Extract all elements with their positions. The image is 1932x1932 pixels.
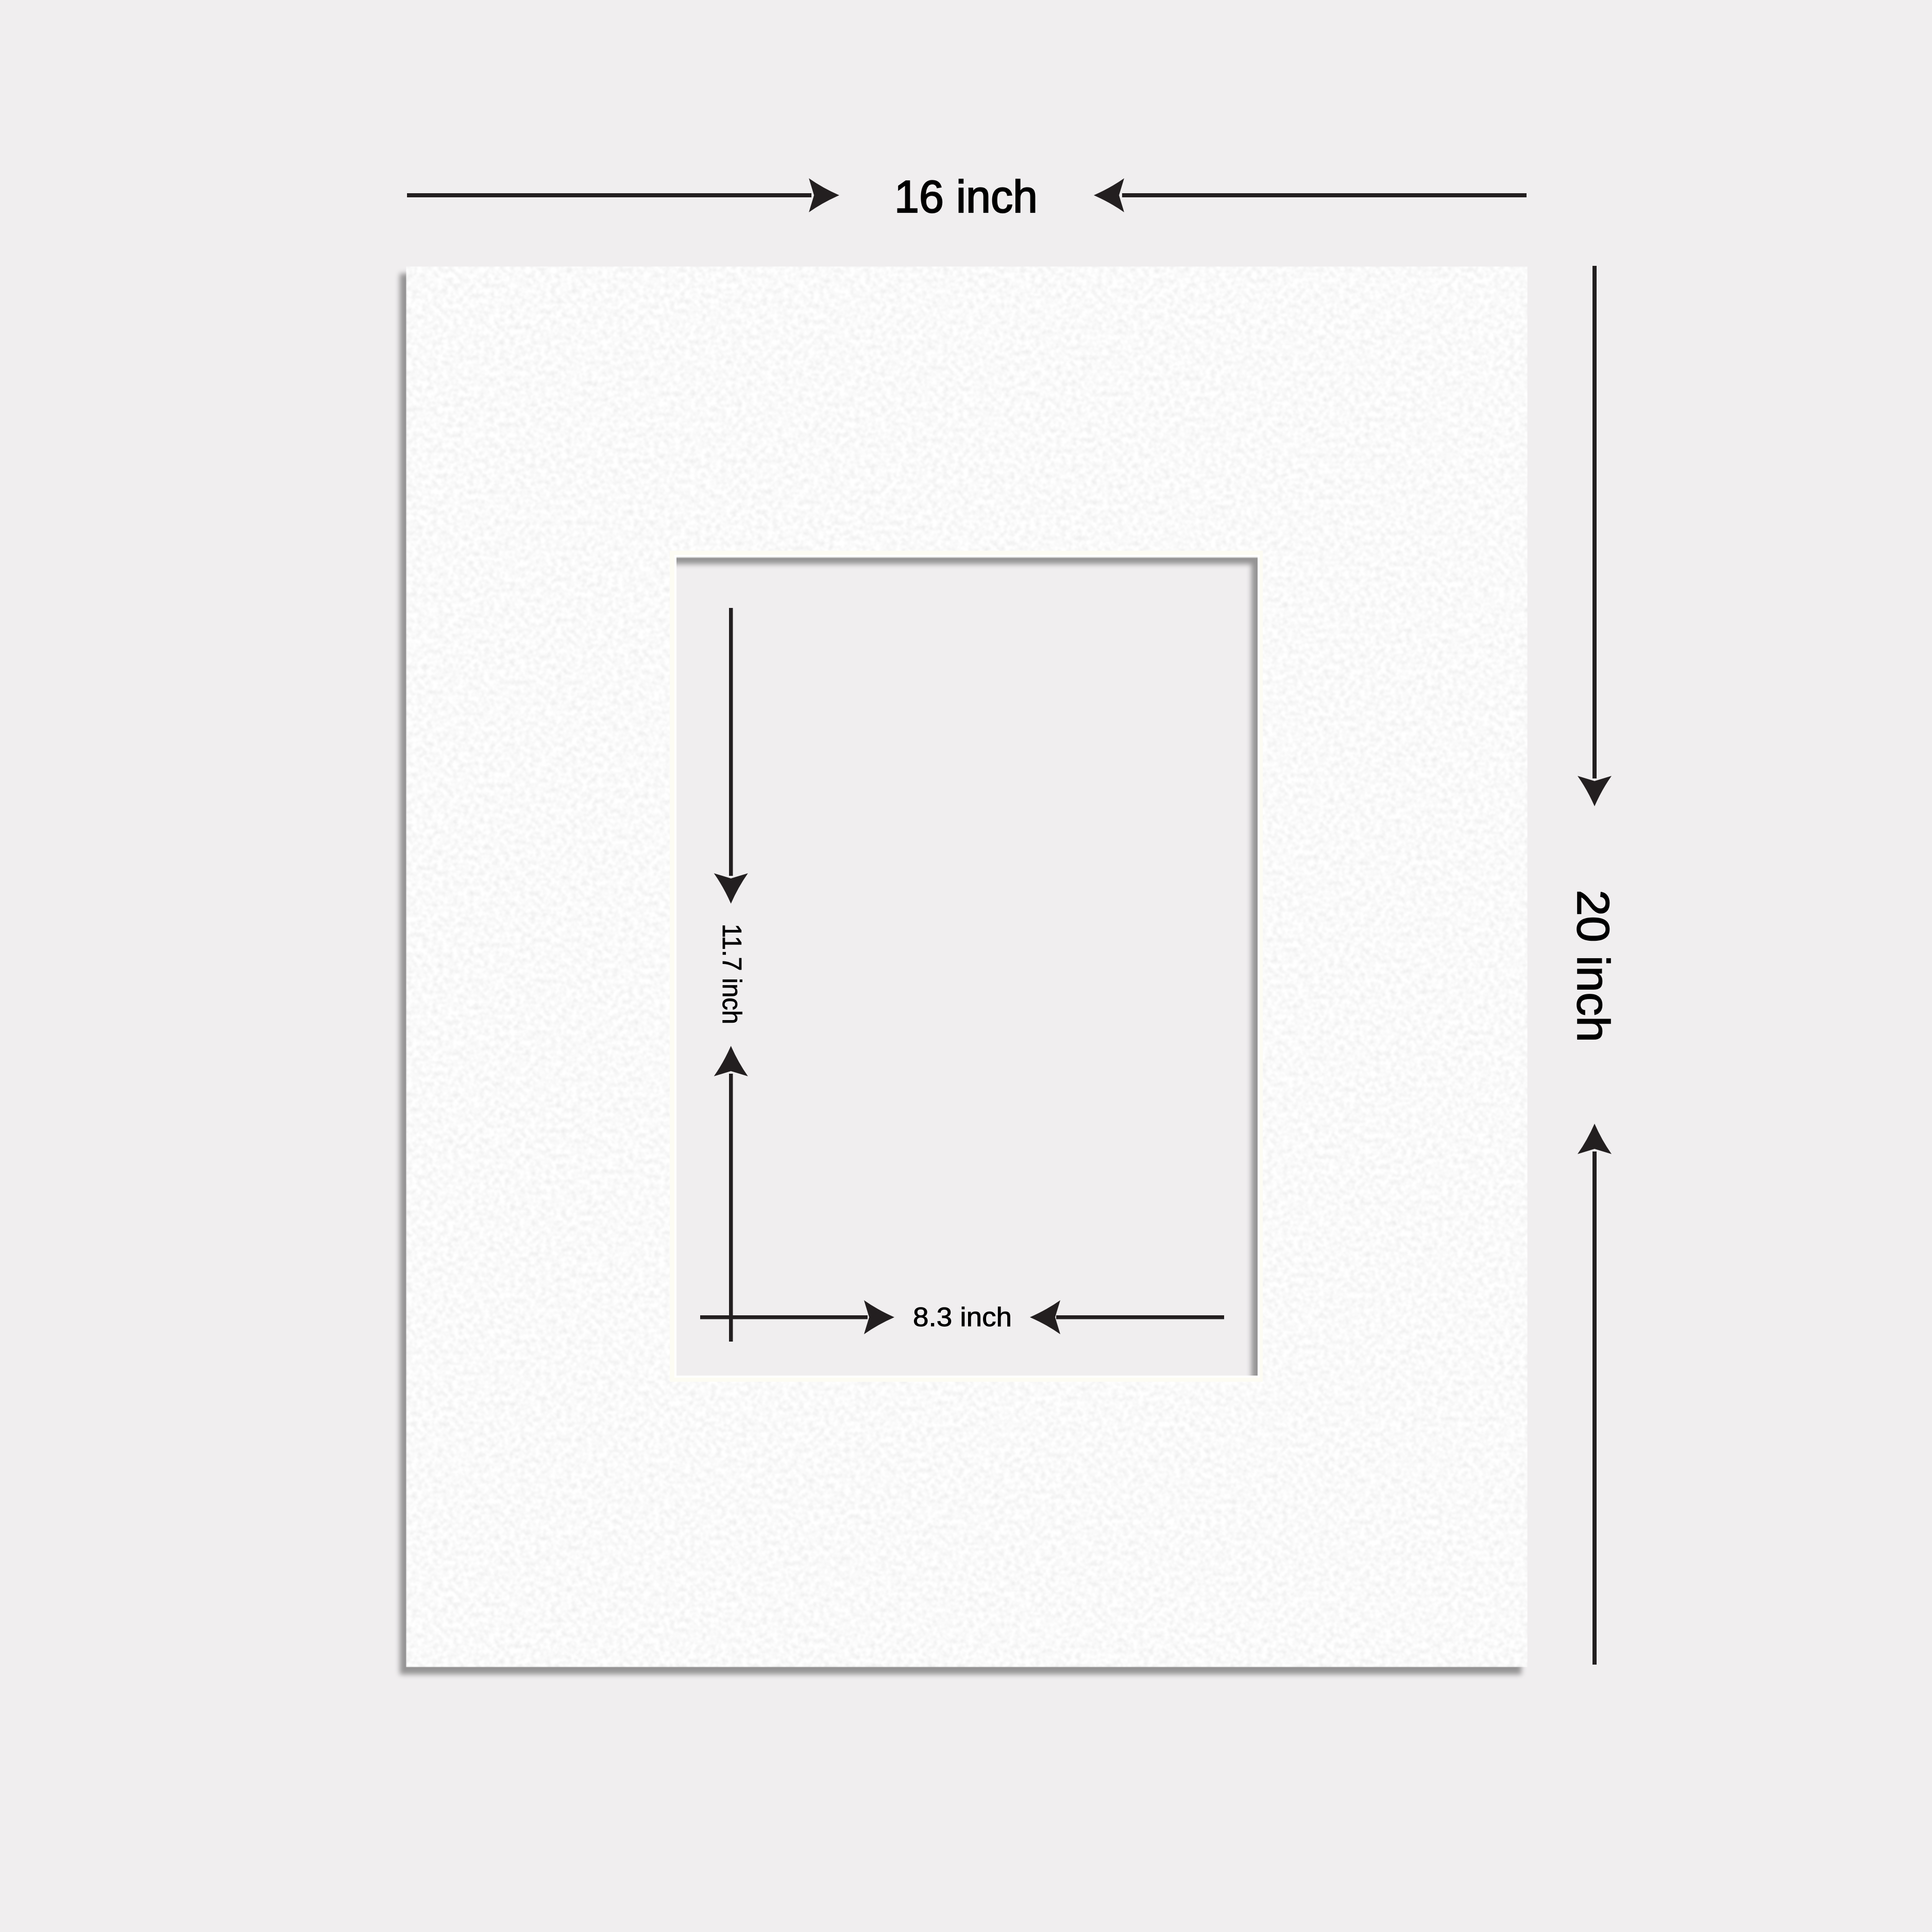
mat board drop shadow (406, 266, 1528, 1667)
arrow: right height down (1578, 266, 1612, 806)
label: 20 inch: 20 inch (1568, 890, 1619, 1042)
arrow: right height up (1578, 1124, 1612, 1665)
label: 16 inch: 16 inch (894, 171, 1038, 222)
arrow: top width right (1094, 178, 1527, 212)
white inner bevel edge (674, 555, 1260, 1378)
light top edge of window shadow (676, 557, 1258, 558)
label: 11.7 inch: 11.7 inch (717, 924, 747, 1024)
arrow: window width left (1030, 1300, 1224, 1334)
panel: white mat board with window opening (406, 266, 1528, 1667)
arrow: window height down (714, 608, 748, 904)
arrow: top width left (407, 178, 839, 212)
cream bevel around window (670, 551, 1263, 1382)
arrow: window width right (700, 1300, 894, 1334)
arrow: window height up (714, 1046, 748, 1342)
label: 8.3 inch: 8.3 inch (913, 1302, 1012, 1332)
mat board surface with paper texture (406, 266, 1528, 1667)
